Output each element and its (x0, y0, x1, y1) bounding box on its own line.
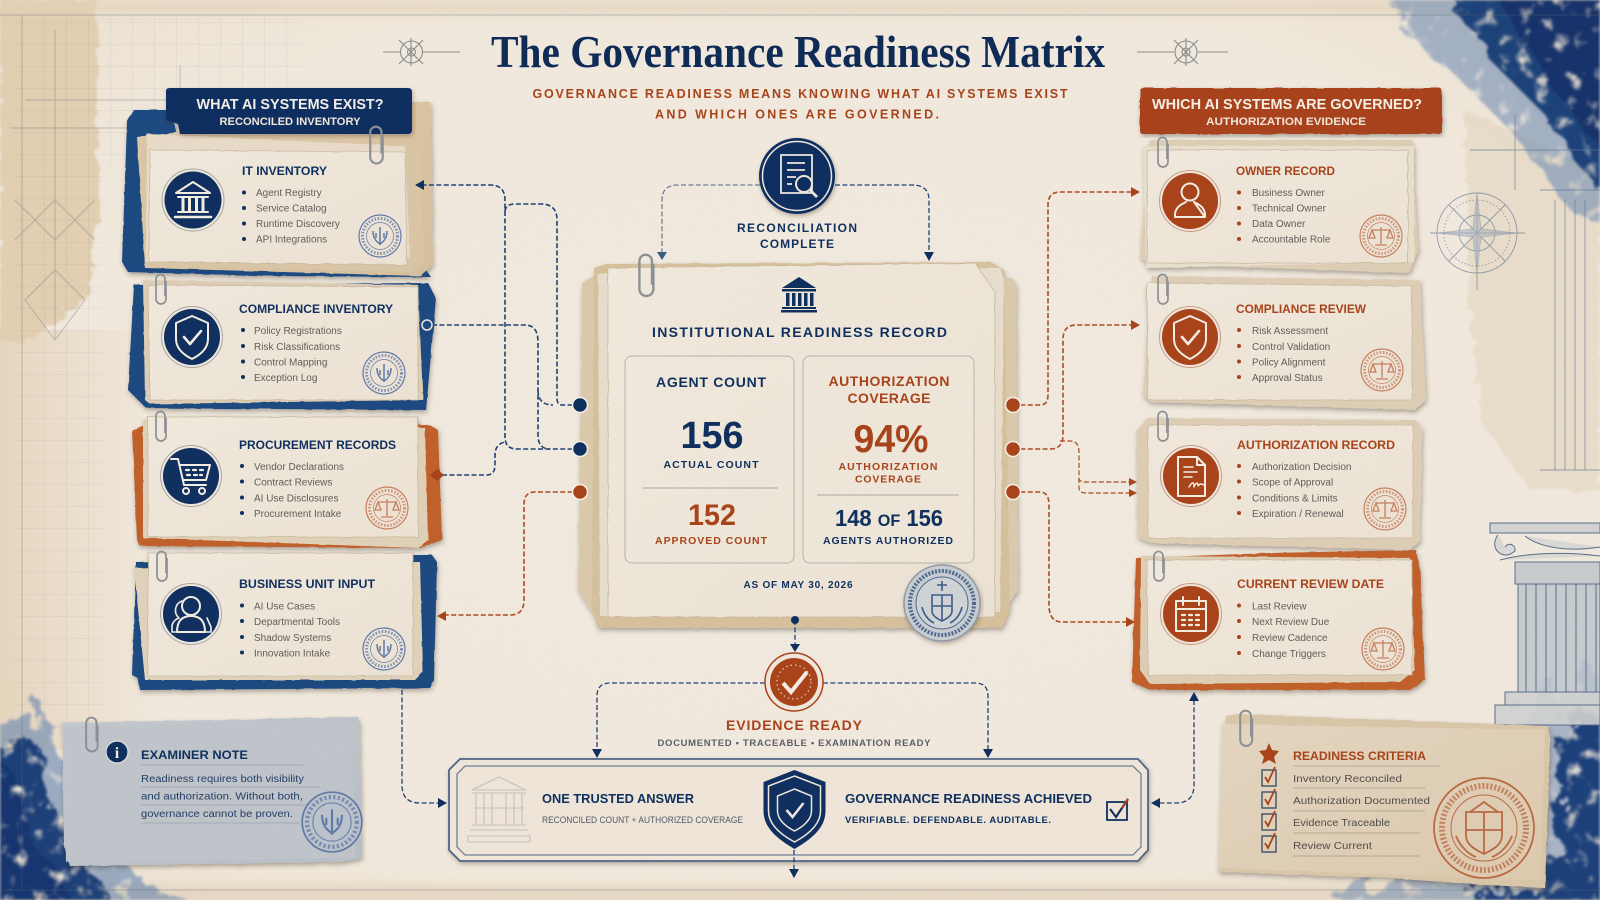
connectors: reconciliation to record (657, 185, 934, 261)
text: governance readiness achieved (845, 792, 1092, 826)
panel: institutional readiness record (578, 255, 1018, 641)
header tab: what AI systems exist (166, 88, 412, 134)
panel: agent count: ACTUAL COUNT (664, 459, 759, 471)
heading: authorization record: AUTHORIZATION RECORD (1237, 438, 1395, 452)
icon: cart (160, 446, 222, 506)
list: procurement items: Contract Reviews (254, 478, 332, 488)
label: evidence ready (658, 717, 931, 749)
list: IT inventory items (242, 188, 340, 246)
text: governance readiness achieved: GOVERNANCE READINESS ACHIEVED (845, 792, 1092, 806)
icon: calendar (1160, 584, 1222, 644)
paperclip (157, 552, 167, 581)
text: examiner note body (141, 773, 305, 820)
heading: compliance inventory: COMPLIANCE INVENTORY (239, 302, 393, 316)
panel: authorization coverage: 94% (854, 418, 928, 461)
panel: examiner note (62, 717, 362, 866)
paperclip (1240, 711, 1252, 746)
ink wash: bottom left (0, 705, 230, 900)
panel: right header tab: WHICH AI SYSTEMS ARE GOVERNED? (1152, 96, 1422, 113)
heading: readiness criteria: READINESS CRITERIA (1293, 749, 1426, 763)
panel: compliance review card (1143, 274, 1426, 410)
header tab: what AI systems exist: WHAT AI SYSTEMS EXIST? (196, 96, 384, 113)
list: owner items (1237, 188, 1331, 246)
icon: shield (764, 770, 826, 849)
icon: shield (1160, 306, 1220, 368)
heading: current review date: CURRENT REVIEW DATE (1237, 577, 1384, 591)
label: reconciliation complete (737, 221, 857, 251)
panel: authorization coverage: 148 OF 156 (835, 505, 943, 531)
subtitle (532, 87, 1068, 122)
paperclip (156, 412, 166, 441)
stamp (359, 215, 401, 257)
heading: owner record: OWNER RECORD (1236, 164, 1335, 178)
panel: agent count: APPROVED COUNT (655, 535, 768, 547)
text: one trusted answer: ONE TRUSTED ANSWER (542, 792, 694, 806)
panel: authorization coverage: COVERAGE (848, 390, 930, 406)
stamp (363, 352, 405, 394)
checklist: Inventory Reconciled (1293, 773, 1402, 785)
panel: authorization coverage: AUTHORIZATION (828, 373, 950, 389)
paperclip (1154, 552, 1164, 581)
icon: reconciliation complete badge (759, 138, 835, 214)
list: authorization items: Authorization Decision (1252, 462, 1352, 473)
list: compliance inventory items: Exception Log (254, 373, 317, 384)
stamp (1361, 349, 1403, 391)
icon: bank (162, 169, 224, 231)
list: IT inventory items: Runtime Discovery (256, 219, 340, 230)
panel: authorization coverage: COVERAGE (855, 474, 921, 486)
stamp (302, 792, 362, 852)
paperclip (1158, 138, 1168, 167)
icon: silver seal (904, 565, 980, 641)
list: compliance inventory items: Policy Registrations (254, 326, 342, 337)
list: compliance review items: Policy Alignment (1252, 358, 1326, 368)
icon: checkbox (1107, 799, 1128, 820)
panel: authorization coverage (803, 356, 974, 563)
panel: outcome banner (449, 759, 1148, 861)
text: one trusted answer: RECONCILED COUNT + AUTHORIZED COVERAGE (542, 815, 743, 825)
compass ornament right (1137, 38, 1228, 66)
stamp (1364, 488, 1406, 530)
panel: agent count: 152 (688, 499, 736, 532)
icon: info: i (115, 745, 120, 762)
connectors: left side (415, 180, 588, 621)
date: AS OF MAY 30, 2026 (744, 580, 853, 591)
list: authorization items: Scope of Approval (1252, 478, 1333, 488)
icon: shield (162, 306, 222, 368)
list: owner items: Technical Owner (1252, 204, 1327, 214)
panel: owner record card (1140, 138, 1418, 273)
list: compliance review items: Risk Assessment (1252, 326, 1328, 337)
ink wash: top right (1375, 0, 1600, 235)
connectors: evidence routing (402, 616, 1199, 878)
label: evidence ready: DOCUMENTED • TRACEABLE • EXAMINATION READY (658, 738, 931, 749)
checklist: Evidence Traceable (1293, 817, 1390, 829)
panel: authorization coverage: AUTHORIZATION (838, 461, 938, 473)
ink wash: bottom right (1290, 660, 1600, 900)
icon: person (1160, 170, 1220, 232)
panel: current review date card (1132, 550, 1425, 690)
subtitle: GOVERNANCE READINESS MEANS KNOWING WHAT AI SYSTEMS EXIST (532, 87, 1068, 101)
list: review date items: Last Review (1252, 602, 1307, 612)
list: compliance review items (1237, 326, 1330, 384)
list: business unit items (240, 602, 340, 660)
list: procurement items: Vendor Declarations (254, 462, 344, 473)
list: authorization items (1237, 462, 1352, 520)
heading: IT inventory: IT INVENTORY (242, 164, 327, 178)
list: compliance inventory items (241, 326, 342, 384)
text: examiner note body: governance cannot be proven. (141, 808, 293, 820)
blueprint sketch: classical column (1490, 523, 1600, 725)
label: evidence ready: EVIDENCE READY (726, 717, 863, 733)
panel: authorization record card (1137, 412, 1422, 550)
checklist: Authorization Documented (1293, 795, 1430, 807)
list: IT inventory items: Agent Registry (256, 188, 322, 199)
blueprint sketch: right with compass (1430, 115, 1600, 470)
icon: people (160, 584, 222, 644)
heading: business unit input: BUSINESS UNIT INPUT (239, 577, 376, 591)
checklist: Review Current (1293, 840, 1372, 852)
list: compliance review items: Control Validation (1252, 342, 1330, 353)
list: business unit items: Shadow Systems (254, 633, 331, 644)
checklist (1262, 766, 1440, 856)
list: IT inventory items: Service Catalog (256, 204, 327, 214)
list: review date items (1237, 602, 1330, 660)
panel: right header tab (1140, 88, 1442, 134)
paperclip (370, 127, 383, 164)
compass ornament left (383, 38, 460, 66)
icon: evidence ready badge (765, 653, 823, 711)
list: procurement items (240, 462, 344, 520)
paperclip (639, 255, 653, 296)
stamp (1360, 215, 1402, 257)
list: authorization items: Conditions & Limits (1252, 494, 1338, 504)
title: The Governance Readiness Matrix (491, 26, 1105, 77)
panel: IT inventory card with left header tab (122, 88, 433, 277)
panel: compliance inventory card (128, 274, 436, 410)
panel: readiness criteria (1218, 711, 1550, 888)
heading: compliance review: COMPLIANCE REVIEW (1236, 302, 1367, 316)
list: owner items: Accountable Role (1252, 234, 1331, 246)
icon: info (106, 741, 128, 763)
icon: star (1259, 743, 1279, 764)
panel: agent count (625, 356, 794, 563)
icon: institution (781, 277, 817, 312)
heading: record title: INSTITUTIONAL READINESS RECORD (652, 324, 947, 340)
text: one trusted answer (542, 792, 743, 825)
paperclip (1158, 274, 1168, 304)
heading: procurement records: PROCUREMENT RECORDS (239, 438, 396, 452)
panel: agent count: 156 (680, 415, 744, 457)
panel: procurement records card (132, 412, 442, 548)
icon: signed document (1160, 446, 1222, 506)
list: business unit items: AI Use Cases (254, 602, 315, 612)
panel: business unit input card (132, 552, 437, 690)
paperclip (86, 718, 98, 752)
list: review date items: Review Cadence (1252, 633, 1328, 644)
panel: agent count: AGENT COUNT (656, 374, 766, 390)
list: procurement items: AI Use Disclosures (254, 494, 338, 504)
list: business unit items: Innovation Intake (254, 648, 331, 660)
text: governance readiness achieved: VERIFIABLE. DEFENDABLE. AUDITABLE. (845, 815, 1051, 826)
paperclip (1158, 412, 1168, 441)
header tab: what AI systems exist: RECONCILED INVENTORY (220, 116, 361, 128)
stamp: crest (1434, 778, 1534, 878)
subtitle: AND WHICH ONES ARE GOVERNED. (655, 108, 939, 122)
list: review date items: Next Review Due (1252, 617, 1330, 628)
paperclip (156, 274, 166, 304)
list: compliance inventory items: Control Mapping (254, 358, 327, 368)
list: compliance inventory items: Risk Classifications (254, 342, 340, 353)
panel: right header tab: AUTHORIZATION EVIDENCE (1206, 116, 1366, 128)
list: review date items: Change Triggers (1252, 649, 1326, 660)
list: compliance review items: Approval Status (1252, 373, 1323, 384)
label: reconciliation complete: COMPLETE (760, 237, 834, 251)
connectors: right side (1006, 187, 1140, 627)
stamp (1362, 628, 1404, 670)
stamp (363, 628, 405, 670)
list: owner items: Business Owner (1252, 188, 1325, 199)
heading: examiner note: EXAMINER NOTE (141, 748, 248, 762)
text: examiner note body: and authorization. Without both, (141, 790, 303, 802)
label: reconciliation complete: RECONCILIATION (737, 221, 857, 235)
list: business unit items: Departmental Tools (254, 617, 340, 628)
list: procurement items: Procurement Intake (254, 509, 342, 520)
icon: temple sketch (468, 777, 530, 842)
list: IT inventory items: API Integrations (256, 234, 327, 246)
stamp (366, 487, 408, 529)
text: examiner note body: Readiness requires both visibility (141, 773, 305, 785)
list: authorization items: Expiration / Renewal (1252, 509, 1344, 520)
panel: authorization coverage: AGENTS AUTHORIZED (823, 535, 953, 547)
list: owner items: Data Owner (1252, 219, 1306, 230)
